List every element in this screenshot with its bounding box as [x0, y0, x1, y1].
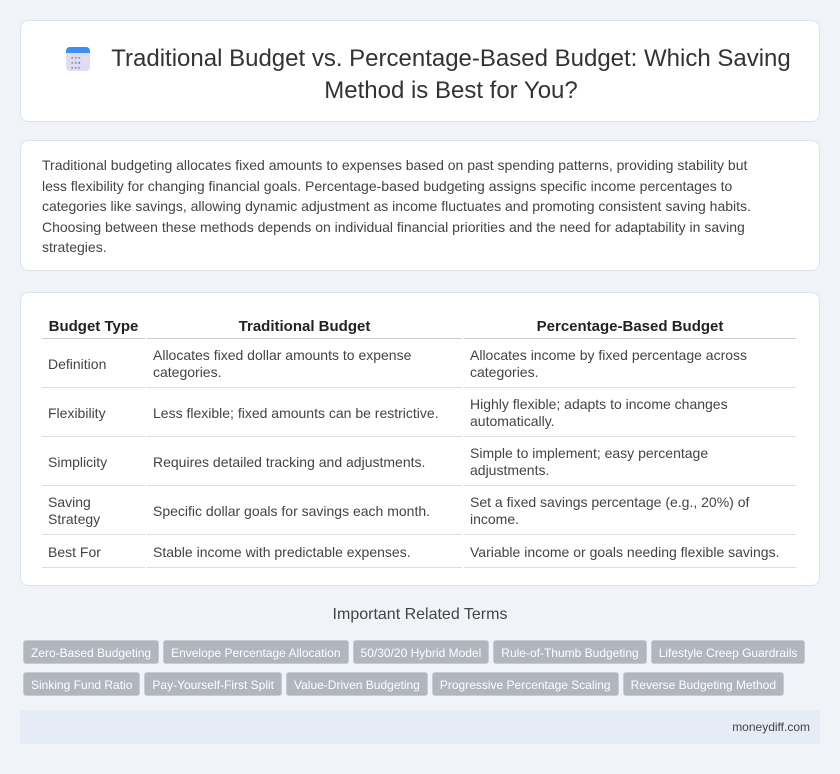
comparison table: Best For — [48, 544, 101, 560]
related terms tags: Envelope Percentage Allocation — [171, 646, 341, 660]
related terms tags: Value-Driven Budgeting — [294, 678, 420, 692]
header card — [20, 20, 820, 122]
comparison table: Simple to implement; easy percentage adjustments. — [470, 445, 708, 478]
comparison table: Percentage-Based Budget — [537, 318, 723, 335]
intro text: Traditional budgeting allocates fixed amounts to expenses based on past spending patterns, providing stability but less flexibility for changing financial goals. Percentage-based budgeting assigns specific income percentages to categories like savings, allowing dynamic adjustment as income fluctuates and promoting consistent saving habits. Choosing between these methods depends on individual financial priorities and the need for adaptability in saving strategies. — [42, 157, 751, 255]
related terms tags: Sinking Fund Ratio — [31, 678, 132, 692]
comparison table: Allocates income by fixed percentage across categories. — [470, 347, 747, 380]
comparison table: Highly flexible; adapts to income changes automatically. — [470, 396, 728, 429]
related terms tags — [23, 640, 805, 696]
icon: calendar — [66, 47, 90, 71]
related terms tags: Reverse Budgeting Method — [631, 678, 776, 692]
comparison table: Flexibility — [48, 404, 106, 420]
related terms tags: Zero-Based Budgeting — [31, 646, 151, 660]
comparison table: Budget Type — [49, 318, 138, 335]
comparison table: Specific dollar goals for savings each month. — [153, 502, 430, 518]
comparison table: Allocates fixed dollar amounts to expense categories. — [153, 347, 411, 380]
title: Traditional Budget vs. Percentage-Based Budget: Which Saving Method is Best for You? — [111, 45, 791, 104]
comparison table: Stable income with predictable expenses. — [153, 544, 411, 560]
comparison table: Traditional Budget — [239, 318, 370, 335]
comparison table — [20, 292, 820, 586]
comparison table: Less flexible; fixed amounts can be restrictive. — [153, 404, 439, 420]
related terms tags: Lifestyle Creep Guardrails — [659, 646, 797, 660]
icon: calendar: ▪▪▪ — [71, 60, 81, 67]
comparison table: Variable income or goals needing flexible savings. — [470, 544, 779, 560]
related terms tags: Pay-Yourself-First Split — [152, 678, 274, 692]
comparison table: Definition — [48, 356, 106, 372]
comparison table: Set a fixed savings percentage (e.g., 20%) of income. — [470, 494, 749, 527]
related terms heading: Important Related Terms — [333, 606, 507, 623]
icon: calendar: ▪▪▪ — [71, 55, 81, 62]
footer: moneydiff.com — [732, 720, 810, 734]
comparison table: Saving Strategy — [48, 494, 100, 527]
intro text — [20, 140, 820, 271]
related terms tags: Rule-of-Thumb Budgeting — [501, 646, 639, 660]
comparison table: Simplicity — [48, 454, 107, 470]
comparison table: Requires detailed tracking and adjustments. — [153, 454, 425, 470]
related terms tags: 50/30/20 Hybrid Model — [361, 646, 481, 660]
footer — [20, 710, 820, 744]
related terms tags: Progressive Percentage Scaling — [440, 678, 611, 692]
